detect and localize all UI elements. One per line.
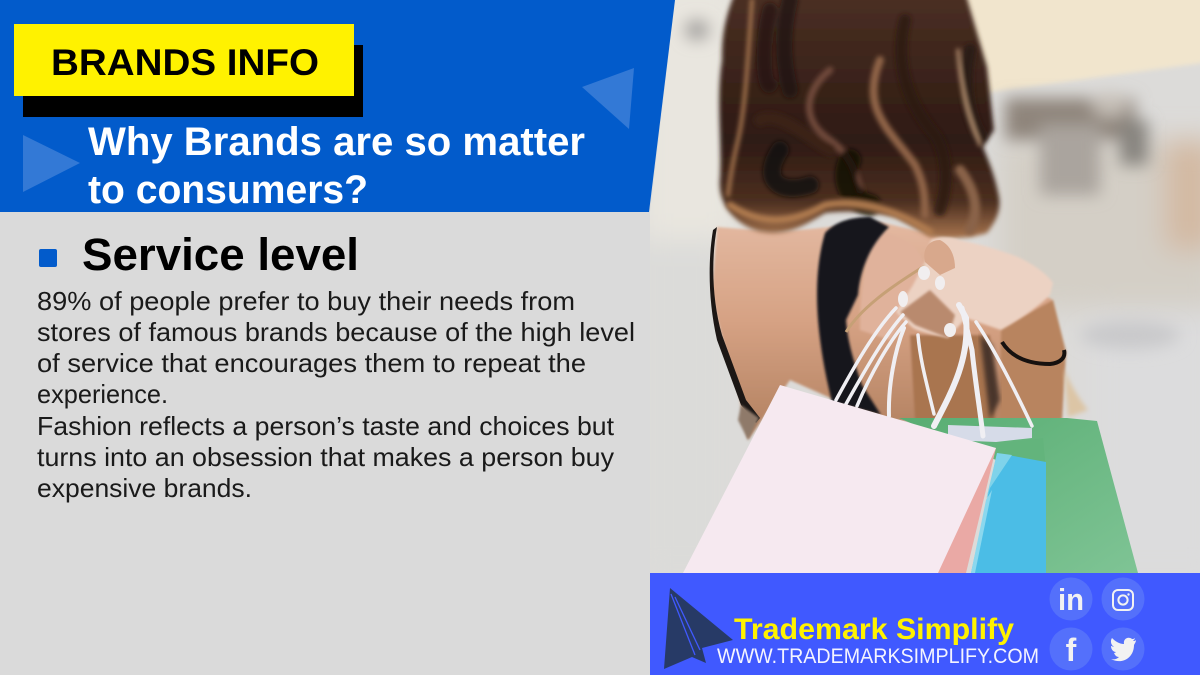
woman: hair (719, 0, 1000, 238)
bullet: blue square (39, 249, 57, 267)
panel: footer bar (650, 573, 1200, 675)
woman: hair strands (728, 0, 980, 232)
heading: why brands matter: Why Brands are so matter (88, 120, 585, 164)
icon: facebook: f (1066, 632, 1077, 668)
body text (37, 286, 635, 503)
woman: black dress (817, 217, 889, 415)
woman: back and arm (712, 222, 1066, 440)
woman: hand (896, 237, 1053, 338)
body text: expensive brands. (37, 473, 252, 503)
woman: hair wisp blond (1064, 368, 1088, 417)
bag: lavender inner (948, 425, 1032, 442)
bag: green (899, 418, 1138, 573)
panel: blue header (0, 0, 675, 212)
icon: twitter (1102, 628, 1144, 670)
badge: brands info (14, 24, 363, 117)
body text: stores of famous brands because of the high level (37, 317, 635, 347)
bag: pink (938, 446, 996, 573)
woman: hair lock in hand (846, 262, 931, 332)
body text: turns into an obsession that makes a person buy (37, 442, 614, 472)
woman: nails (898, 266, 956, 337)
brand name: Trademark Simplify (734, 613, 1014, 646)
bag: handles (836, 305, 1032, 436)
decorative triangle left (23, 135, 80, 192)
body text: of service that encourages them to repeat the (37, 348, 586, 378)
icon: facebook (1050, 628, 1092, 670)
bag: blue (971, 453, 1046, 573)
icon: instagram (1102, 578, 1144, 620)
woman: black bra strap (710, 227, 760, 423)
photo: woman with shopping bags (640, 0, 1200, 580)
icon: linkedin (1050, 578, 1092, 620)
decorative triangle right (582, 68, 634, 129)
heading: why brands matter: to consumers? (88, 168, 368, 212)
body text: 89% of people prefer to buy their needs from (37, 286, 575, 316)
badge: brands info: BRANDS INFO (51, 42, 319, 83)
subheading: service level: Service level (82, 229, 359, 280)
heading: why brands matter (88, 120, 585, 212)
body text: Fashion reflects a person’s taste and choices but (37, 411, 615, 441)
icon: linkedin: in (1058, 582, 1084, 617)
woman: bracelet (1002, 342, 1064, 364)
icon: paper plane logo (664, 588, 733, 669)
body text: experience. (37, 379, 168, 409)
background: cream wall (955, 0, 1200, 92)
website url: WWW.TRADEMARKSIMPLIFY.COM (717, 645, 1039, 668)
